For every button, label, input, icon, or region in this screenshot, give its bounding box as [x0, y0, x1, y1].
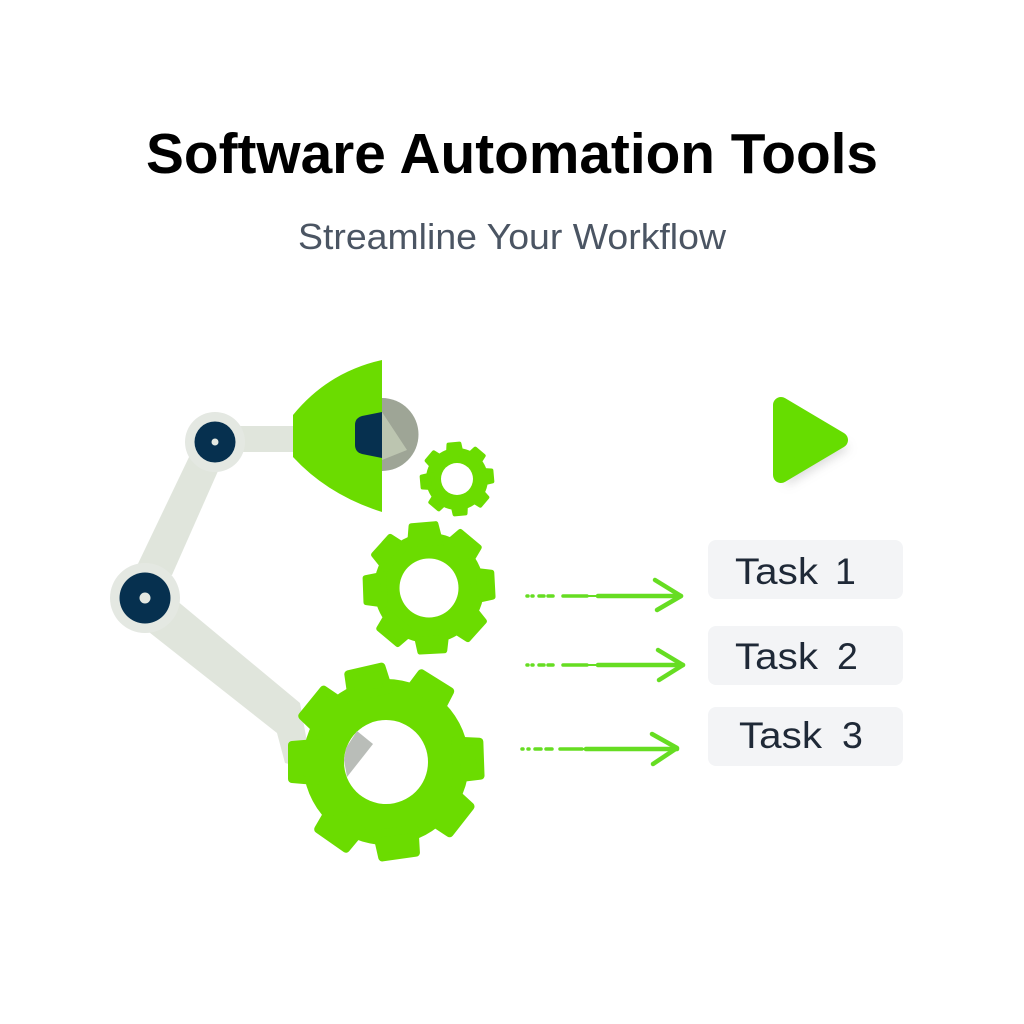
task 2: Task: [735, 635, 818, 677]
arrow to task 1: [527, 580, 681, 610]
arm segments: [135, 426, 312, 770]
large gear: [292, 666, 481, 858]
play icon: [781, 405, 850, 486]
gear hub wedge: [344, 731, 373, 777]
task 2: [708, 626, 903, 685]
task 1: 1: [835, 550, 856, 592]
arrow to task 3: [522, 734, 677, 764]
gripper head: [293, 360, 418, 512]
task 3: [708, 707, 903, 766]
task 3: 3: [842, 714, 863, 756]
task 2: 2: [837, 635, 858, 677]
small gear: [422, 444, 492, 514]
task 3: Task: [739, 714, 822, 756]
arrow to task 2: [527, 650, 683, 680]
title: Software Automation Tools: [146, 122, 878, 186]
upper joint: [185, 412, 245, 472]
robotic arm: [110, 360, 418, 770]
lower joint: [110, 563, 180, 633]
medium gear: [366, 524, 493, 652]
task 1: [708, 540, 903, 599]
task 1: Task: [735, 550, 818, 592]
subtitle: Streamline Your Workflow: [298, 216, 727, 257]
